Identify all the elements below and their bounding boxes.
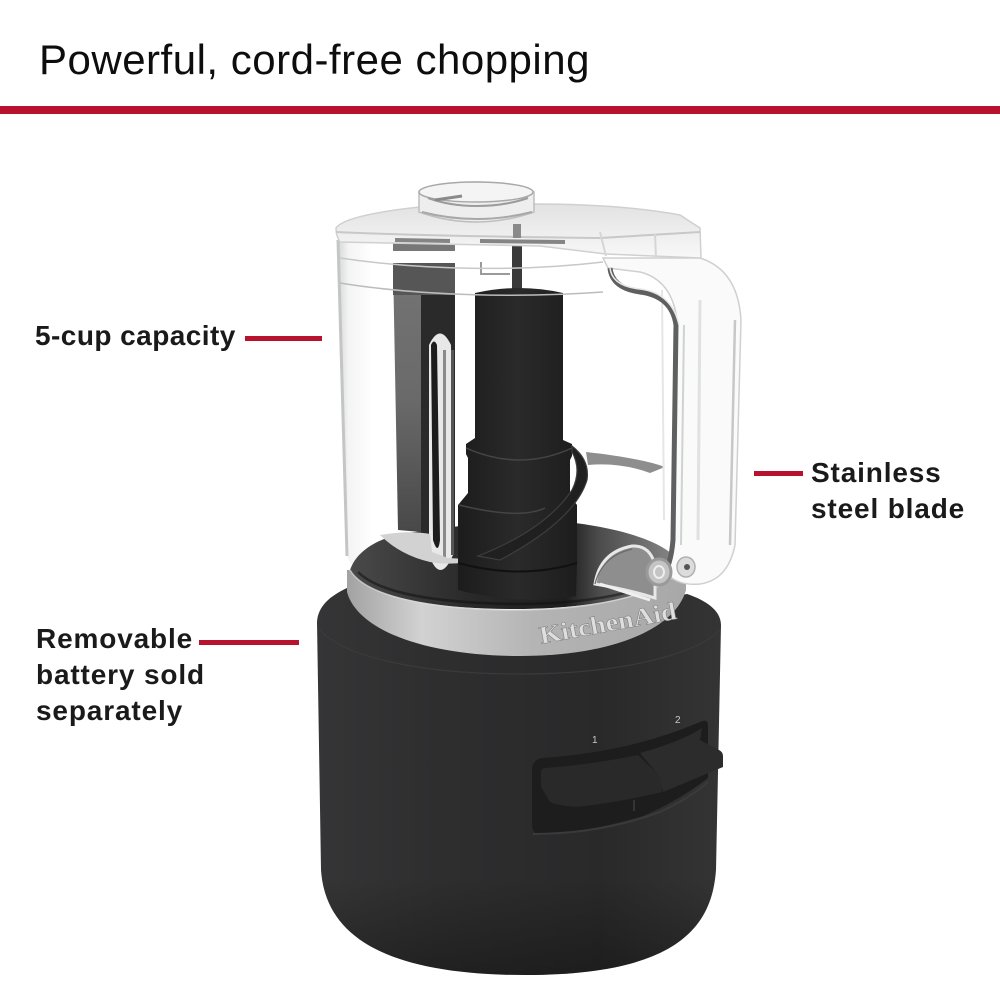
- inner pillar: [393, 238, 570, 533]
- header rule: [0, 106, 1000, 114]
- bowl lid: [336, 204, 701, 258]
- bowl edge and band lines: [338, 240, 664, 556]
- central pin: [481, 223, 522, 291]
- speed paddle: [532, 721, 723, 835]
- bowl handle: [603, 258, 741, 584]
- silver ring: [347, 566, 686, 656]
- callout: battery: [36, 623, 205, 726]
- callout line: blade: [754, 471, 803, 476]
- right blade: [586, 452, 665, 473]
- motor base: [317, 588, 721, 975]
- callout: capacity: 5-cup capacity: [35, 320, 236, 351]
- bowl glass: [338, 240, 690, 610]
- central stem: [458, 288, 587, 600]
- handle hinge: [595, 546, 695, 600]
- callout: blade: steel blade: [811, 493, 965, 524]
- callout: blade: [811, 457, 965, 524]
- left blade: [380, 532, 485, 564]
- callout: battery: separately: [36, 695, 183, 726]
- speed labels: [592, 715, 681, 746]
- inner bowl floor: [350, 523, 682, 610]
- callout: battery: Removable: [36, 623, 193, 654]
- inner fin: [429, 334, 454, 570]
- callout line: battery: [199, 640, 299, 645]
- lid knob: [419, 182, 534, 222]
- title: Powerful, cord-free chopping: [39, 36, 590, 83]
- speed labels: 1: [592, 735, 598, 746]
- speed labels: 2: [675, 715, 681, 726]
- callout line: capacity: [245, 336, 322, 341]
- callout: blade: Stainless: [811, 457, 942, 488]
- logo: KitchenAid: [537, 598, 679, 650]
- callout: battery: battery sold: [36, 659, 205, 690]
